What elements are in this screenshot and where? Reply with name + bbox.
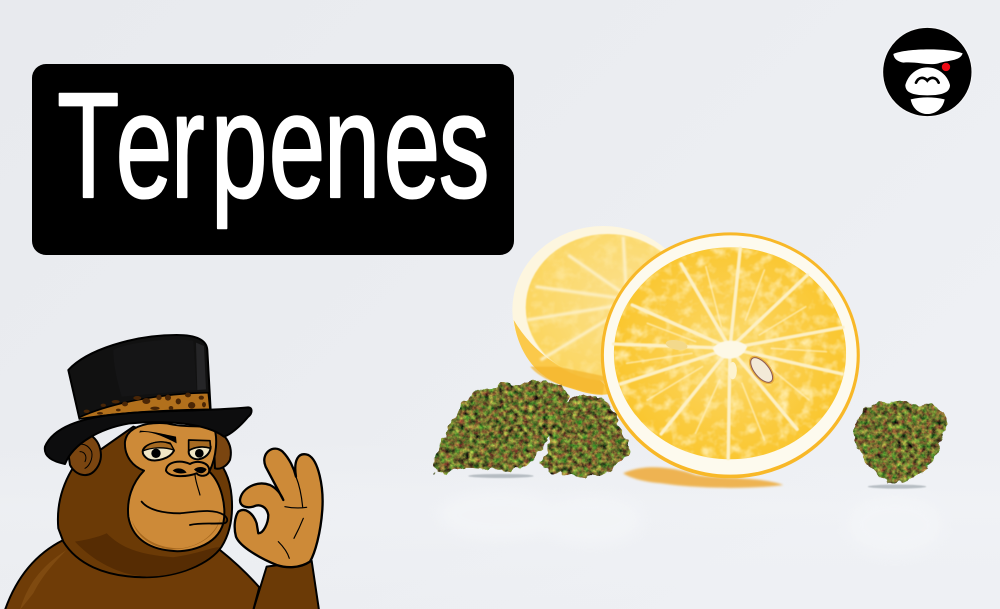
hat brim (45, 407, 252, 464)
table reflections (438, 489, 943, 555)
title text: Terpenes (57, 63, 490, 230)
left shoulder shade (20, 550, 67, 609)
hand creases (278, 477, 307, 558)
face (125, 423, 224, 551)
logo nose and face (905, 67, 950, 95)
bud shadows (468, 474, 926, 489)
forearm (253, 561, 319, 609)
photo: lemons and cannabis buds (437, 226, 945, 489)
neck shade (75, 533, 220, 577)
back lemon (512, 226, 694, 395)
hat (45, 335, 252, 464)
juice reflection (623, 467, 783, 488)
hat highlight (113, 340, 197, 397)
back lemon flesh (526, 234, 690, 381)
lemon centre (713, 341, 747, 359)
nose (166, 462, 209, 476)
head fur (58, 427, 232, 577)
lemon pulp highlights (627, 267, 826, 440)
face shade (132, 517, 221, 549)
lemon pulp texture (614, 247, 846, 459)
right ear (213, 430, 231, 469)
bud pair left (437, 381, 568, 475)
left seed ghost (665, 339, 688, 351)
logo nostrils (916, 78, 939, 83)
nose line (195, 475, 200, 495)
nostrils (173, 467, 207, 473)
front lemon (601, 232, 860, 478)
logo red eye (942, 63, 950, 71)
bud middle (539, 394, 628, 477)
left ear (68, 434, 101, 475)
hat band (79, 393, 210, 419)
monkey mascot (5, 335, 323, 609)
eyes (139, 431, 211, 460)
logo: gorilla badge (883, 27, 972, 117)
logo chin (911, 97, 945, 114)
lemon seed (744, 352, 779, 388)
leopard spots (84, 393, 206, 415)
title panel (32, 63, 514, 255)
mouth (142, 502, 227, 525)
lemon flesh (614, 247, 846, 459)
logo brow (893, 49, 963, 64)
left ear inner (75, 444, 92, 468)
lemon segment membranes (614, 248, 843, 459)
bud right (854, 401, 945, 482)
torso (5, 540, 259, 609)
back lemon shadow (530, 367, 606, 395)
hand OK gesture (235, 449, 323, 567)
small seed (729, 362, 737, 379)
hat crown (68, 335, 211, 418)
table surface (0, 440, 1000, 609)
